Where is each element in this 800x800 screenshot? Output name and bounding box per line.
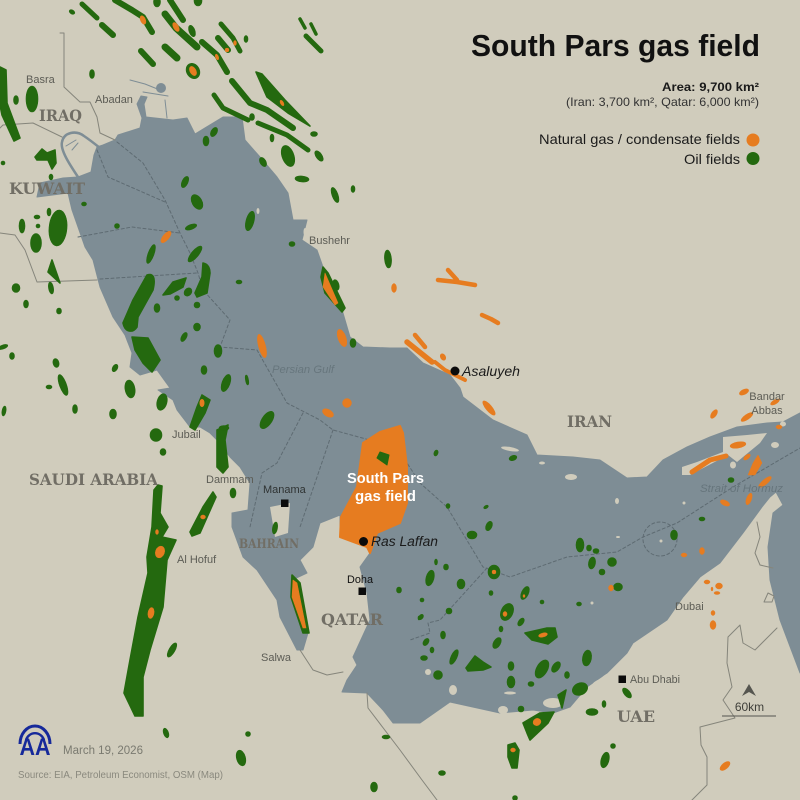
legend: Natural gas / condensate fields xyxy=(539,131,740,147)
scale bar and north arrow: 60km xyxy=(735,700,764,714)
label: Bandar Abbas xyxy=(749,391,785,417)
date: March 19, 2026 xyxy=(63,745,143,757)
map: maritime borders xyxy=(78,142,800,640)
legend: Oil fields xyxy=(684,151,740,167)
label: Strait of Hormuz: Strait of Hormuz xyxy=(700,483,784,495)
marker: Manama xyxy=(281,500,288,507)
label: Bandar Abbas: Abbas xyxy=(751,405,783,417)
field: South Pars gas field xyxy=(340,426,407,553)
legend xyxy=(539,131,760,167)
country label: BAHRAIN: BAHRAIN xyxy=(239,537,299,552)
area text: (Iran: 3,700 km², Qatar: 6,000 km²) xyxy=(566,95,759,109)
map: land islands xyxy=(256,208,786,714)
label: Abu Dhabi: Abu Dhabi xyxy=(630,674,680,686)
title: South Pars gas field xyxy=(471,28,760,63)
country label: KUWAIT: KUWAIT xyxy=(9,179,85,198)
label: Dammam: Dammam xyxy=(206,474,254,486)
field: Jubail offshore oil with gas core xyxy=(190,395,210,430)
marker: Doha xyxy=(358,588,366,595)
label: South Pars gas field: gas field xyxy=(355,489,416,505)
label: Bushehr: Bushehr xyxy=(309,235,350,247)
label: Abadan: Abadan xyxy=(95,94,133,106)
country label: QATAR: QATAR xyxy=(321,610,384,629)
gas fields xyxy=(139,15,782,772)
field: Bahrain-Qatar offshore oil with gas core xyxy=(291,575,309,633)
country label: SAUDI ARABIA: SAUDI ARABIA xyxy=(29,470,159,489)
logo: AA: AA xyxy=(20,734,50,761)
country label: UAE: UAE xyxy=(617,707,655,726)
label: South Pars gas field: South Pars xyxy=(347,471,424,487)
label: Salwa: Salwa xyxy=(261,652,292,664)
marker: Ras Laffan: Ras Laffan xyxy=(371,534,438,549)
country label: IRAN: IRAN xyxy=(567,412,612,431)
map: sea xyxy=(37,80,800,723)
field: Bushehr coastal oil with gas core xyxy=(321,267,345,312)
label: Persian Gulf: Persian Gulf xyxy=(272,364,335,376)
label: Dubai: Dubai xyxy=(675,601,704,613)
source: Source: EIA, Petroleum Economist, OSM (Map) xyxy=(18,770,223,781)
marker: Abu Dhabi xyxy=(618,676,626,683)
label: South Pars gas field xyxy=(347,471,424,505)
area text: Area: 9,700 km² xyxy=(662,80,759,94)
area text xyxy=(566,80,759,109)
label: Jubail: Jubail xyxy=(172,429,201,441)
label: Doha: Doha xyxy=(347,574,374,586)
country label: IRAQ: IRAQ xyxy=(39,106,82,125)
label: Bandar Abbas: Bandar xyxy=(749,391,785,403)
label: Al Hofuf: Al Hofuf xyxy=(177,554,217,566)
scale bar and north arrow xyxy=(722,684,776,716)
label: Basra: Basra xyxy=(26,74,56,86)
marker: Asaluyeh: Asaluyeh xyxy=(461,363,520,379)
label: Manama: Manama xyxy=(263,484,307,496)
